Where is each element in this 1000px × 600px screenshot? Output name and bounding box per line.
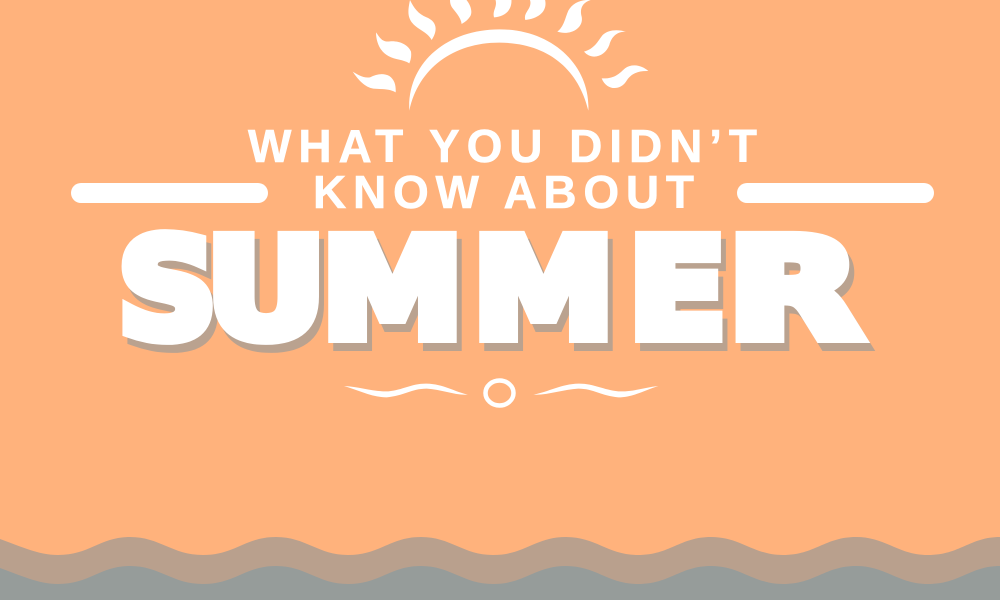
waves: front layer: [0, 566, 1000, 600]
heading: summer: [118, 210, 860, 370]
ornament: swashes and ring: [344, 380, 658, 406]
heading: summer: E: [629, 210, 726, 369]
left rule: [81, 183, 258, 203]
heading: summer: M: [322, 210, 463, 369]
icon: sun: [353, 0, 648, 111]
ring: [486, 380, 514, 406]
title line two: KNOW ABOUT: [313, 166, 694, 218]
right swash: [533, 384, 658, 397]
right rule: [747, 183, 924, 203]
title line one: WHAT YOU DIDN’T: [248, 120, 757, 172]
heading: summer: S: [118, 212, 216, 370]
heading: summer: R: [728, 210, 860, 369]
left swash: [344, 384, 468, 397]
heading: summer: U: [207, 211, 325, 369]
waves: back layer: [0, 537, 1000, 600]
heading: summer: M: [473, 210, 614, 369]
title: what you didn't know about: [248, 120, 757, 218]
